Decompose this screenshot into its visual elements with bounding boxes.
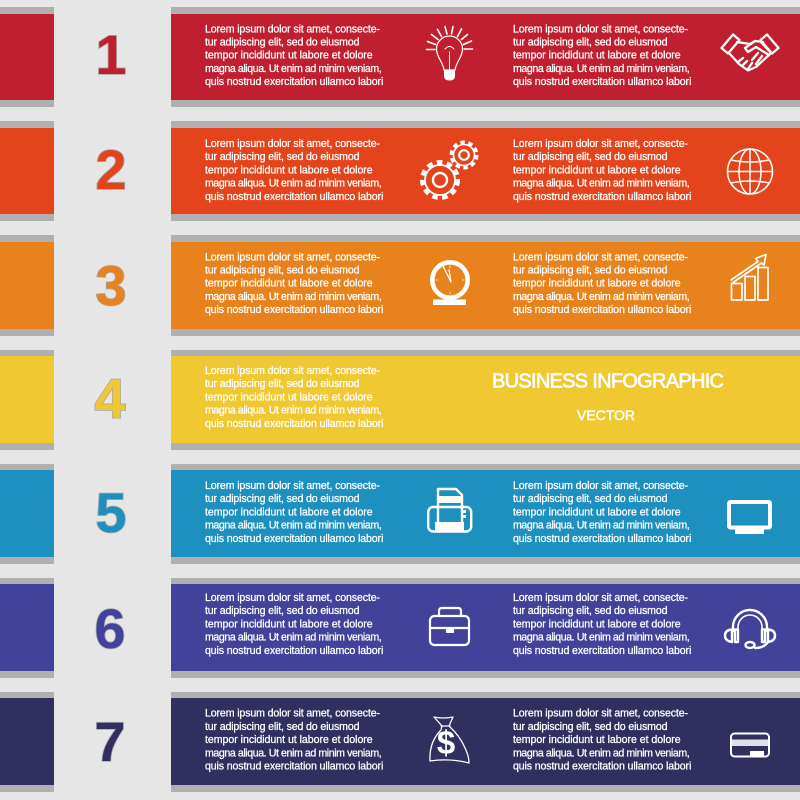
text block: row 1 right: Lorem ipsum dolor sit amet, consecte- xyxy=(513,23,688,35)
number 6: 6 xyxy=(94,597,126,660)
text block: row 7 right: tempor incididunt ut labore et dolore xyxy=(513,734,681,746)
icon: monitor xyxy=(729,502,770,534)
text block: row 6 right: Lorem ipsum dolor sit amet, consecte- xyxy=(513,592,688,604)
text block: row 3 right xyxy=(513,251,691,316)
text block: row 7 left: quis nostrud exercitation ullamco labori xyxy=(205,761,383,773)
number 3: 3 xyxy=(95,254,127,317)
row 7 band: navy xyxy=(0,692,800,792)
text block: row 1 right: tur adipiscing elit, sed do eiusmod xyxy=(513,36,668,48)
number 7: 7 xyxy=(94,710,126,773)
text block: row 4 left: quis nostrud exercitation ullamco labori xyxy=(205,418,383,430)
text block: row 3 left: quis nostrud exercitation ullamco labori xyxy=(205,304,383,316)
text block: row 7 right xyxy=(513,708,691,772)
text block: row 5 left: tempor incididunt ut labore et dolore xyxy=(205,506,373,518)
text block: row 7 right: Lorem ipsum dolor sit amet, consecte- xyxy=(513,708,688,720)
icon: money bag xyxy=(430,717,469,763)
text block: row 7 right: tur adipiscing elit, sed do eiusmod xyxy=(513,721,668,733)
text block: row 2 left: tempor incididunt ut labore et dolore xyxy=(205,164,373,176)
text block: row 3 left xyxy=(205,251,383,316)
text block: row 3 left: tempor incididunt ut labore et dolore xyxy=(205,278,373,290)
row 6 band: indigo xyxy=(0,578,800,678)
text block: row 6 right: quis nostrud exercitation ullamco labori xyxy=(513,645,691,657)
text block: row 1 left: quis nostrud exercitation ullamco labori xyxy=(205,76,383,88)
icon: briefcase xyxy=(430,608,469,645)
text block: row 2 right: Lorem ipsum dolor sit amet, consecte- xyxy=(513,138,688,150)
text block: row 1 left: tur adipiscing elit, sed do eiusmod xyxy=(205,36,360,48)
text block: row 7 left: Lorem ipsum dolor sit amet, consecte- xyxy=(205,708,380,720)
subheading: vector: VECTOR xyxy=(577,407,635,423)
text block: row 3 right: tempor incididunt ut labore et dolore xyxy=(513,278,681,290)
text block: row 3 right: Lorem ipsum dolor sit amet, consecte- xyxy=(513,251,688,263)
text block: row 3 right: tur adipiscing elit, sed do eiusmod xyxy=(513,264,668,276)
text block: row 4 left: Lorem ipsum dolor sit amet, consecte- xyxy=(205,365,380,377)
text block: row 6 left: Lorem ipsum dolor sit amet, consecte- xyxy=(205,592,380,604)
text block: row 1 left: Lorem ipsum dolor sit amet, consecte- xyxy=(205,23,380,35)
text block: row 6 right: tur adipiscing elit, sed do eiusmod xyxy=(513,605,668,617)
text block: row 1 right: tempor incididunt ut labore et dolore xyxy=(513,50,681,62)
row 2 band: orange red xyxy=(0,121,800,221)
icon: clock xyxy=(432,262,468,305)
icon: gears xyxy=(422,142,476,198)
icon: credit card xyxy=(731,734,769,757)
text block: row 5 left: tur adipiscing elit, sed do eiusmod xyxy=(205,493,360,505)
heading: business infographic: BUSINESS INFOGRAPHIC xyxy=(492,370,724,392)
text block: row 7 left: tempor incididunt ut labore et dolore xyxy=(205,734,373,746)
icon: money bag: $ xyxy=(437,724,455,761)
number 2: 2 xyxy=(95,138,127,201)
text block: row 4 left: tur adipiscing elit, sed do eiusmod xyxy=(205,378,360,390)
number 1: 1 xyxy=(95,23,127,86)
text block: row 3 left: magna aliqua. Ut enim ad minim veniam, xyxy=(205,291,382,303)
text block: row 5 left xyxy=(205,480,383,545)
text block: row 2 left: quis nostrud exercitation ullamco labori xyxy=(205,191,383,203)
text block: row 1 right: magna aliqua. Ut enim ad minim veniam, xyxy=(513,63,690,75)
text block: row 5 left: magna aliqua. Ut enim ad minim veniam, xyxy=(205,520,382,532)
text block: row 5 right: tempor incididunt ut labore et dolore xyxy=(513,506,681,518)
text block: row 1 left xyxy=(205,23,383,88)
text block: row 1 right xyxy=(513,23,691,88)
text block: row 5 right: tur adipiscing elit, sed do eiusmod xyxy=(513,493,668,505)
text block: row 3 left: tur adipiscing elit, sed do eiusmod xyxy=(205,264,360,276)
text block: row 4 left xyxy=(205,365,383,430)
text block: row 2 left: magna aliqua. Ut enim ad minim veniam, xyxy=(205,178,382,190)
text block: row 2 right: magna aliqua. Ut enim ad minim veniam, xyxy=(513,178,690,190)
text block: row 5 left: Lorem ipsum dolor sit amet, consecte- xyxy=(205,480,380,492)
row 3 band: orange xyxy=(0,235,800,336)
text block: row 7 left: magna aliqua. Ut enim ad minim veniam, xyxy=(205,747,382,759)
text block: row 5 right xyxy=(513,480,691,545)
text block: row 5 right: Lorem ipsum dolor sit amet, consecte- xyxy=(513,480,688,492)
icon: handshake xyxy=(722,34,778,70)
text block: row 5 right: magna aliqua. Ut enim ad minim veniam, xyxy=(513,520,690,532)
text block: row 2 left xyxy=(205,138,383,203)
text block: row 7 right: magna aliqua. Ut enim ad minim veniam, xyxy=(513,747,690,759)
icon: headset xyxy=(725,610,775,648)
text block: row 1 left: magna aliqua. Ut enim ad minim veniam, xyxy=(205,63,382,75)
number 5: 5 xyxy=(95,481,127,544)
text block: row 6 right: tempor incididunt ut labore et dolore xyxy=(513,618,681,630)
icon: printer xyxy=(428,489,471,532)
text block: row 6 right: magna aliqua. Ut enim ad minim veniam, xyxy=(513,632,690,644)
icon: globe xyxy=(728,149,772,194)
text block: row 5 left: quis nostrud exercitation ullamco labori xyxy=(205,533,383,545)
text block: row 6 left: quis nostrud exercitation ullamco labori xyxy=(205,645,383,657)
text block: row 3 right: quis nostrud exercitation ullamco labori xyxy=(513,304,691,316)
text block: row 2 left: tur adipiscing elit, sed do eiusmod xyxy=(205,151,360,163)
text block: row 1 left: tempor incididunt ut labore et dolore xyxy=(205,50,373,62)
text block: row 2 right xyxy=(513,138,691,203)
text block: row 6 left: tur adipiscing elit, sed do eiusmod xyxy=(205,605,360,617)
text block: row 5 right: quis nostrud exercitation ullamco labori xyxy=(513,533,691,545)
icon: light bulb xyxy=(426,26,472,80)
text block: row 2 right: quis nostrud exercitation ullamco labori xyxy=(513,191,691,203)
text block: row 3 right: magna aliqua. Ut enim ad minim veniam, xyxy=(513,291,690,303)
text block: row 6 left xyxy=(205,592,383,657)
text block: row 4 left: tempor incididunt ut labore et dolore xyxy=(205,391,373,403)
text block: row 1 right: quis nostrud exercitation ullamco labori xyxy=(513,76,691,88)
row 5 band: blue xyxy=(0,464,800,564)
icon: bar chart with arrow xyxy=(731,254,768,300)
row 1 band: red xyxy=(0,7,800,107)
text block: row 6 left: magna aliqua. Ut enim ad minim veniam, xyxy=(205,632,382,644)
number 4: 4 xyxy=(94,367,126,430)
text block: row 2 right: tur adipiscing elit, sed do eiusmod xyxy=(513,151,668,163)
text block: row 6 right xyxy=(513,592,691,657)
text block: row 2 left: Lorem ipsum dolor sit amet, consecte- xyxy=(205,138,380,150)
text block: row 6 left: tempor incididunt ut labore et dolore xyxy=(205,618,373,630)
row 4 band: yellow xyxy=(0,350,800,450)
text block: row 2 right: tempor incididunt ut labore et dolore xyxy=(513,164,681,176)
text block: row 4 left: magna aliqua. Ut enim ad minim veniam, xyxy=(205,405,382,417)
text block: row 3 left: Lorem ipsum dolor sit amet, consecte- xyxy=(205,251,380,263)
text block: row 7 left xyxy=(205,708,383,772)
text block: row 7 right: quis nostrud exercitation ullamco labori xyxy=(513,761,691,773)
text block: row 7 left: tur adipiscing elit, sed do eiusmod xyxy=(205,721,360,733)
